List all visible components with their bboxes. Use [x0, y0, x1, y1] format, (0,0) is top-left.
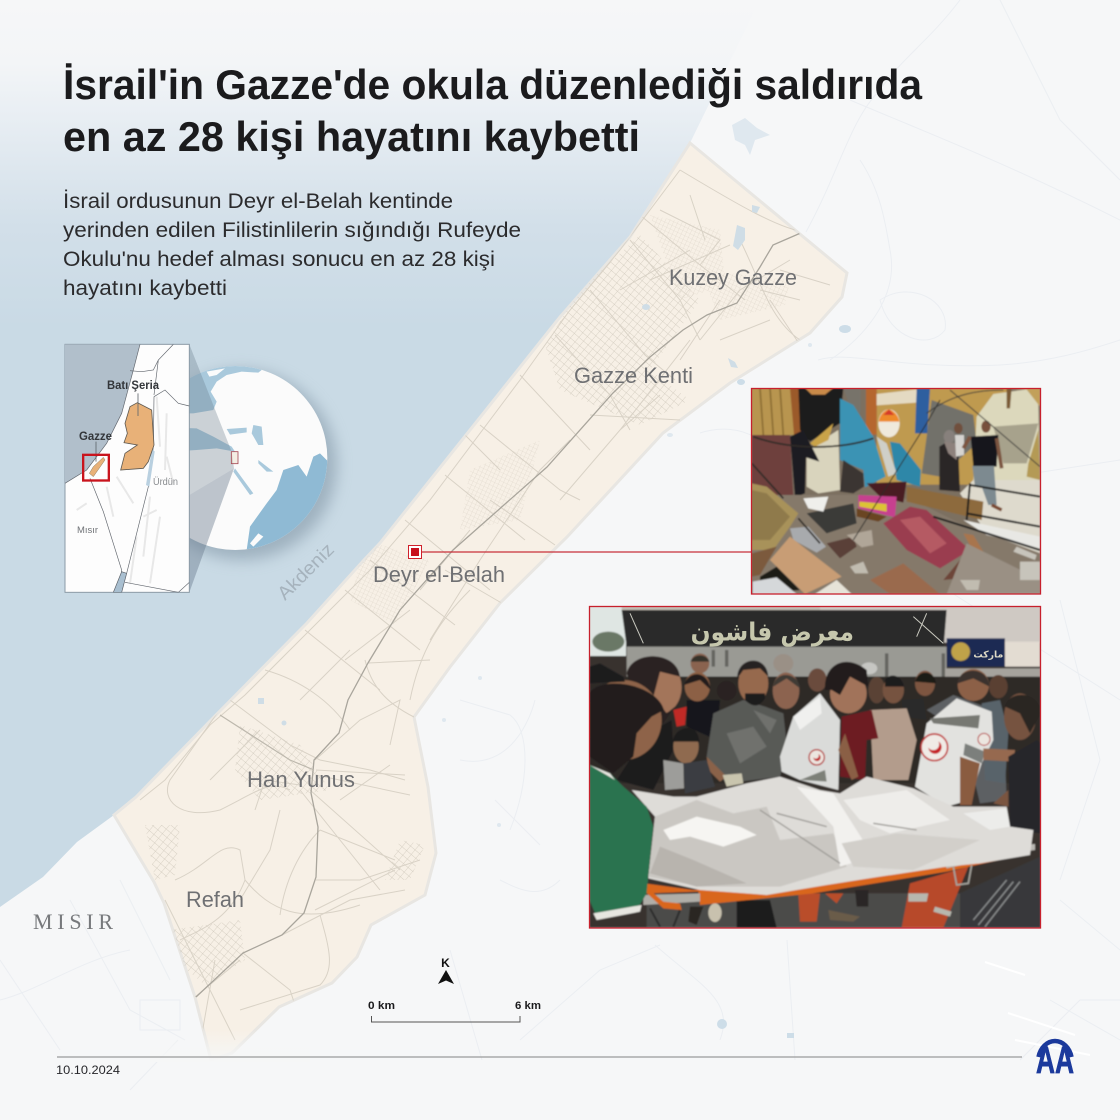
connector line and strike marker	[408, 546, 752, 558]
date: 10.10.2024	[56, 1063, 120, 1077]
man grey shirt	[707, 700, 787, 783]
inset labels	[77, 378, 178, 535]
inset labels: Gazze	[79, 429, 112, 443]
map: Gaza Strip	[114, 143, 847, 1062]
main road	[196, 232, 803, 997]
inner water	[258, 205, 760, 726]
bottom fade	[150, 1030, 310, 1062]
place labels: Kuzey Gazze	[669, 265, 797, 290]
body bag	[632, 777, 1033, 895]
scale bar: 6 km	[515, 1000, 541, 1012]
photo: damaged school interior	[751, 388, 1041, 594]
footer rule	[57, 1056, 1022, 1058]
paramedic centre	[780, 693, 840, 790]
logo: Anadolu Agency: AA	[1036, 1040, 1074, 1082]
north arrow: K	[441, 956, 450, 970]
title	[63, 61, 923, 160]
title: en az 28 kişi hayatını kaybetti	[63, 113, 640, 160]
photo: stretcher and crowd	[585, 606, 1041, 928]
country label: Mısır: MISIR	[33, 909, 113, 934]
crowd	[589, 677, 1041, 783]
paramedic right	[915, 698, 993, 807]
place labels: Refah	[186, 887, 244, 912]
inset labels: Mısır	[77, 525, 98, 535]
description text: hayatını kaybetti	[63, 277, 227, 300]
inset labels: Ürdün	[153, 476, 178, 488]
man far right	[1008, 740, 1041, 833]
place labels: Deyr el-Belah	[373, 562, 505, 587]
sea	[0, 0, 760, 907]
stretcher	[646, 860, 996, 906]
logo: Anadolu Agency	[1036, 1040, 1074, 1082]
road network	[140, 170, 830, 1045]
place labels: Gazze Kenti	[574, 363, 693, 388]
ground	[646, 893, 960, 927]
photo: stretcher and crowd: ماركت	[973, 649, 1004, 660]
description text: İsrail ordusunun Deyr el-Belah kentinde	[63, 190, 453, 213]
north arrow	[438, 956, 454, 984]
locator: globe and inset map	[65, 344, 337, 592]
man left beard	[617, 720, 673, 790]
water spots	[442, 118, 851, 1038]
description text: Okulu'nu hedef alması sonucu en az 28 kişi	[63, 248, 495, 271]
scale bar	[368, 1000, 541, 1022]
man green shirt	[606, 679, 663, 760]
inset labels: Batı Şeria	[107, 378, 159, 392]
zoom cone	[189, 344, 234, 495]
scale bar: 0 km	[368, 1000, 395, 1012]
place labels	[186, 265, 797, 912]
shop sign: معرض فاشون	[691, 617, 854, 648]
sea label: Akdeniz: Akdeniz	[274, 539, 339, 605]
description text: yerinden edilen Filistinlilerin sığındığı Rufeyde	[63, 219, 521, 242]
title: İsrail'in Gazze'de okula düzenlediği saldırıda	[63, 61, 923, 108]
inset map	[65, 344, 189, 592]
place labels: Han Yunus	[247, 767, 355, 792]
globe	[190, 346, 343, 591]
territory shape	[114, 143, 847, 1060]
description text	[63, 190, 521, 300]
boy	[672, 740, 700, 764]
